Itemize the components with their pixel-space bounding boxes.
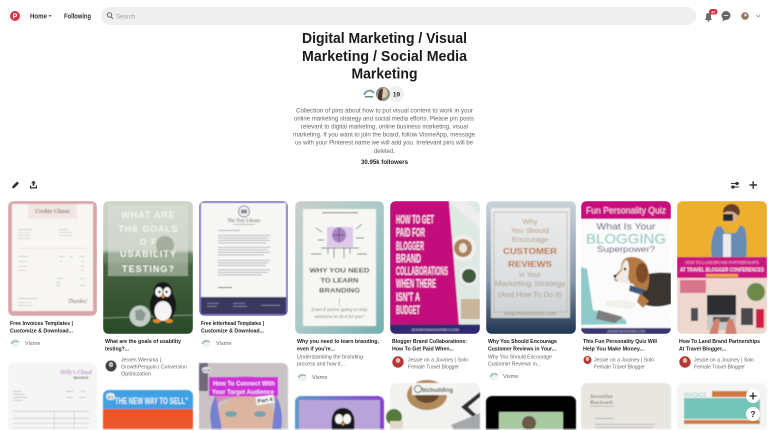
top navigation bar xyxy=(10,7,760,25)
avatar: collaborator xyxy=(376,87,390,101)
pin image: the tiny library letterhead: The Tiny Library xyxy=(227,219,261,224)
caption xyxy=(10,321,73,334)
pin image: why you should encourage customer reviews: You Should xyxy=(511,226,549,235)
pin image: travel blogger conferences xyxy=(677,201,767,334)
caption: even if you're... xyxy=(297,346,335,352)
caption: How To Get Paid When... xyxy=(392,346,454,352)
pin: holly's cloud invoice: Hilly's Cloud xyxy=(59,370,93,376)
pin: brand partnerships xyxy=(677,201,767,370)
caption xyxy=(488,339,557,352)
nav link: following: Following xyxy=(64,14,91,20)
pin image: penguin on soccer field: THE GOALS xyxy=(118,224,178,234)
pin: how to connect with your target audience: How To Connect With xyxy=(213,380,275,388)
source: jeroen wiersma xyxy=(106,358,187,378)
floating add button xyxy=(746,389,760,403)
caption: This Fun Personality Quiz Will xyxy=(583,339,657,345)
pin image: why you should encourage customer reviews: in Your xyxy=(519,272,541,279)
caption: How To Land Brand Partnerships xyxy=(679,339,760,345)
follower count: 30.95k followers xyxy=(361,159,408,166)
collaborator count: 19 xyxy=(393,91,400,98)
pin image: why you should encourage customer reviews: REVIEWS xyxy=(508,259,552,269)
pin: how to connect with your target audience: Part 4 xyxy=(257,397,274,405)
pin image: why you should encourage customer reviews: (And How To Do It) xyxy=(498,292,562,299)
board description: relevant to digital marketing, online business marketing, visual xyxy=(301,124,468,130)
pin: the new way to sell: "THE NEW WAY TO SELL" xyxy=(112,396,188,406)
pin image: how to get paid xyxy=(390,201,480,334)
avatar: visme xyxy=(363,88,375,100)
floating help button: ? xyxy=(751,410,756,419)
pin: invoice teal and orange xyxy=(677,383,767,430)
caption xyxy=(392,339,467,352)
caption: At Travel Blogger... xyxy=(679,346,726,352)
description xyxy=(297,354,363,368)
pin: jennifer bucknell resume: Jennifer xyxy=(590,395,613,400)
source: jessie on a journey: Female Travel Blogger xyxy=(594,364,645,370)
pin image: penguin on soccer field: TESTING? xyxy=(122,264,174,274)
caption: What are the goals of usability xyxy=(105,339,182,345)
source: jessie on a journey: Jessie on a Journey | Solo xyxy=(594,358,654,364)
source: jessie on a journey xyxy=(584,356,654,370)
pin image: why you need to learn branding xyxy=(295,201,384,334)
search bar xyxy=(101,7,696,25)
icon: filter sliders xyxy=(731,182,739,188)
pin: portrait on black xyxy=(486,396,576,430)
description: Why You Should Encourage xyxy=(488,354,552,360)
caption: Why you need to learn branding, xyxy=(297,339,379,345)
source: jessie on a journey xyxy=(392,356,468,370)
pin image: how to get paid: BRAND xyxy=(396,252,421,266)
search bar: Search xyxy=(116,14,135,20)
board description: marketing. If you want to join the board, follow VismeApp, message xyxy=(293,132,475,138)
icon: pinterest logo: P xyxy=(13,14,18,20)
pin image: why you should encourage customer reviews: Marketing Strategy xyxy=(494,281,566,288)
pin image: why you should encourage customer reviews: CUSTOMER xyxy=(503,246,557,256)
pin image: penguin on soccer field xyxy=(103,201,193,334)
pin image: why you should encourage customer reviews: Encourage xyxy=(512,235,548,244)
caption: testing?... xyxy=(105,346,129,352)
icon: brain circuit xyxy=(311,224,367,258)
source: visme: Visme xyxy=(25,341,40,347)
pin: jennifer bucknell resume: Bucknell xyxy=(590,401,614,406)
board title: Marketing xyxy=(352,66,418,82)
pin image: why you need to learn branding: BRANDING xyxy=(319,288,360,294)
pin: invoice template xyxy=(8,201,97,348)
caption: Customize & Download... xyxy=(10,328,73,334)
floating help button xyxy=(746,407,760,421)
pin image: blogging superpower xyxy=(581,201,671,334)
pin image: cookie classe invoice: Thanks! xyxy=(68,299,87,305)
icon: add plus xyxy=(750,181,757,189)
pin: the new way to sell xyxy=(103,390,193,430)
board description: us with your Pinterest name we will add you. Irrelevant pins will be xyxy=(295,140,473,147)
pin image: penguin on soccer field: OF xyxy=(140,237,157,247)
pin image: how to get paid: BUDGET xyxy=(396,303,420,317)
nav link: home: Home xyxy=(30,14,47,20)
caption: Customer Reviews in Your... xyxy=(488,346,556,352)
icon: share xyxy=(30,180,37,188)
pin: holly's cloud invoice: INVOICE xyxy=(74,376,89,380)
pin image: cookie classe invoice: Cookie Classe xyxy=(35,209,70,215)
board collaborators xyxy=(363,86,404,102)
icon: account chevron xyxy=(756,15,760,17)
pin image: blogging superpower: BLOGGING xyxy=(586,230,666,246)
icon: beagle with laptop xyxy=(581,257,671,325)
source: jeroen wiersma: Jeroen Wiersma | xyxy=(121,358,161,364)
source: visme: Visme xyxy=(312,375,327,381)
icon: home dropdown arrow xyxy=(48,15,52,17)
icon: profile avatar xyxy=(741,12,749,20)
pin: customer reviews xyxy=(486,201,576,380)
description: process and how it... xyxy=(297,362,345,368)
source: jessie on a journey: Jessie on a Journey | Solo xyxy=(694,358,754,364)
caption: Blogger Brand Collaborations: xyxy=(392,339,467,345)
board description: deleted. xyxy=(374,148,395,155)
icon: penguin xyxy=(150,282,176,323)
pin image: why you need to learn branding: someone to do it for you? xyxy=(314,314,365,319)
pin: usability testing xyxy=(103,201,193,378)
pin: bizbudding xyxy=(386,380,480,430)
description xyxy=(488,354,552,368)
pin image: why you should encourage customer reviews: Why xyxy=(522,217,538,226)
pin: how to connect with your target audience: 4:18 xyxy=(203,368,210,372)
icon: notifications bell xyxy=(705,9,718,22)
caption xyxy=(201,321,264,334)
source: jessie on a journey: Female Travel Blogger xyxy=(408,364,459,370)
source: visme xyxy=(10,338,40,348)
caption: Customize & Download... xyxy=(201,328,264,334)
description: Customer Reviews in... xyxy=(488,362,541,368)
pin: learn branding xyxy=(295,201,384,382)
board description: online marketing strategy and social media efforts. Please pin posts xyxy=(294,115,474,122)
pin image: blogging superpower: Fun Personality Quiz xyxy=(586,206,666,216)
icon: edit pencil xyxy=(12,182,19,188)
icon: notifications bell: 47 xyxy=(711,10,715,14)
pin: jennifer bucknell resume xyxy=(581,383,671,430)
pin image: how to get paid: JESSIEONAJOURNEY.COM xyxy=(411,327,459,332)
pin image: why you need to learn branding: TO LEARN xyxy=(320,278,359,284)
pin image: why you need to learn branding: Even if you're going to duty xyxy=(312,307,368,312)
source: visme xyxy=(490,372,518,380)
board title: Marketing / Social Media xyxy=(302,49,468,65)
description: Understanding the branding xyxy=(297,354,363,360)
caption xyxy=(297,339,379,352)
board title: Digital Marketing / Visual xyxy=(302,31,467,47)
caption: Free Invoices Templates | xyxy=(10,321,73,327)
pin: bizbudding: bizbudding xyxy=(422,388,453,394)
icon: soccer ball xyxy=(130,306,150,326)
caption: Why You Should Encourage xyxy=(488,339,557,345)
board description xyxy=(293,107,475,155)
pin image: how to get paid: WHEN THERE xyxy=(396,276,436,290)
pin: how to connect with your target audience: Your Target Audience xyxy=(212,389,274,396)
pin image: penguin on soccer field: USABILITY xyxy=(120,249,176,259)
pin: blogger brand collaborations xyxy=(390,201,480,370)
pin image: blogging superpower: JESSIEONAJOURNEY.COM xyxy=(607,330,645,334)
pin image: how to get paid: HOW TO GET xyxy=(396,212,434,226)
source: visme xyxy=(202,338,231,348)
source: jeroen wiersma: Optimization xyxy=(121,372,151,378)
caption xyxy=(583,339,657,352)
source: jeroen wiersma: GrowthPenguin | Conversion xyxy=(121,364,187,370)
pin image: how to get paid: ISN'T A xyxy=(396,290,420,304)
pin: penguin on purple xyxy=(295,396,384,430)
pin: letterhead template xyxy=(199,201,288,348)
source: visme: Visme xyxy=(503,374,518,380)
pin image: blogging superpower: What Is Your xyxy=(596,222,656,232)
pin image: how to get paid: PAID FOR xyxy=(396,226,425,240)
source: jessie on a journey: Female Travel Blogger xyxy=(694,364,745,370)
source: jessie on a journey xyxy=(679,356,754,370)
pin image: travel blogger conferences: HOW TO LAND BRAND PARTNERSHIPS xyxy=(685,260,759,265)
second row of pins xyxy=(8,363,767,430)
pin image: the tiny library letterhead xyxy=(199,201,288,316)
pin image: why you need to learn branding: WHY YOU NEED xyxy=(310,268,370,274)
caption xyxy=(105,339,182,352)
pin image: how to get paid: COLLABORATIONS xyxy=(396,264,448,278)
source: jessie on a journey: Jessie on a Journey | Solo xyxy=(408,358,468,364)
pin image: cookie classe invoice xyxy=(8,201,97,316)
caption xyxy=(679,339,760,352)
board description: Collection of pins about how to put visual content to work in your xyxy=(296,107,474,114)
source: visme xyxy=(298,372,327,382)
pin image: penguin on soccer field: WHAT ARE xyxy=(122,210,174,220)
pin image: how to get paid: BLOGGER xyxy=(396,239,424,253)
source: visme: Visme xyxy=(216,341,231,347)
caption: Free letterhead Templates | xyxy=(201,321,264,327)
board title xyxy=(302,31,468,82)
pin: holly's cloud invoice xyxy=(8,363,97,430)
pin image: why you should encourage customer reviews xyxy=(486,201,576,334)
pin: personality quiz xyxy=(581,201,671,370)
pin image: blogging superpower: Superpower? xyxy=(597,244,655,254)
pin: how to connect with your target audience xyxy=(199,363,288,430)
pin image: why you should encourage customer reviews: blog.thecrazizbiz.com xyxy=(504,311,556,316)
caption: Help You Make Money... xyxy=(583,346,644,352)
icon: messages xyxy=(722,11,730,22)
pin: the new way to sell: 6:1 xyxy=(108,395,113,399)
icon: pinterest logo xyxy=(10,11,20,21)
pin: invoice teal and orange: INVOICE xyxy=(684,392,708,399)
